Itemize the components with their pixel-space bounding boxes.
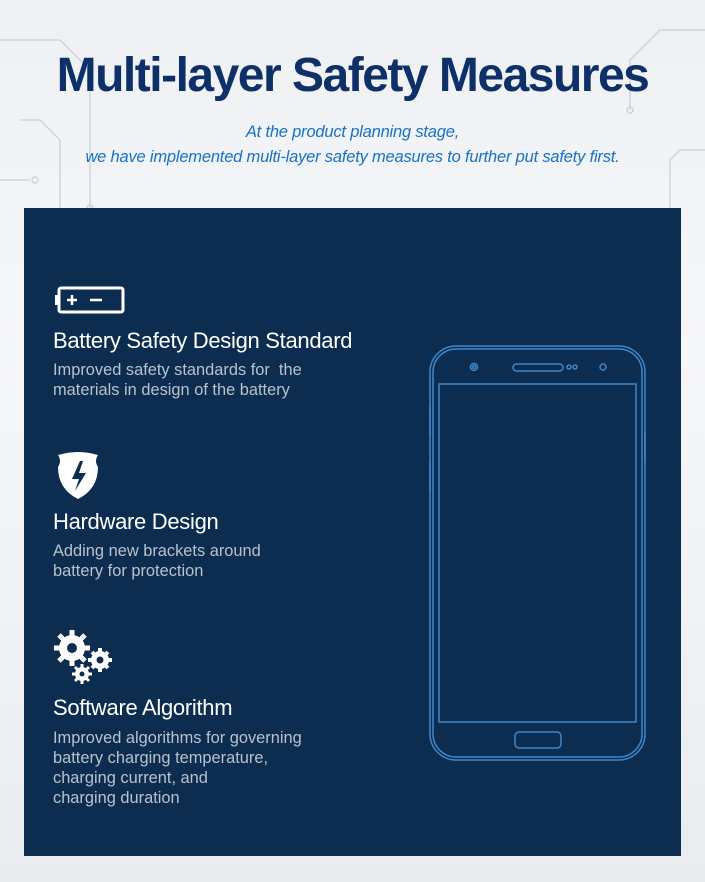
text: software: Improved algorithms for governing [53, 729, 302, 747]
text: battery [53, 361, 302, 399]
heading: software: Software Algorithm [53, 695, 232, 720]
icon: gears [54, 630, 112, 684]
text: hardware [53, 542, 261, 580]
subtitle [85, 123, 620, 166]
text: software: charging current, and [53, 769, 208, 787]
title: Multi-layer Safety Measures [57, 49, 648, 102]
text: software: battery charging temperature, [53, 749, 268, 767]
subtitle: At the product planning stage, [246, 123, 459, 141]
icon: shield [58, 452, 98, 499]
illustration: phone [429, 345, 646, 761]
heading: battery: Battery Safety Design Standard [53, 328, 352, 353]
text: software: charging duration [53, 789, 180, 807]
text: hardware: battery for protection [53, 562, 203, 580]
icon: battery [55, 286, 124, 314]
text: hardware: Adding new brackets around [53, 542, 261, 560]
heading: hardware: Hardware Design [53, 509, 218, 534]
panel: main [24, 208, 681, 856]
text: software [53, 729, 302, 807]
text: battery: materials in design of the battery [53, 381, 290, 399]
text: battery: Improved safety standards for the [53, 361, 302, 379]
subtitle: we have implemented multi-layer safety measures to further put safety first. [85, 148, 620, 166]
